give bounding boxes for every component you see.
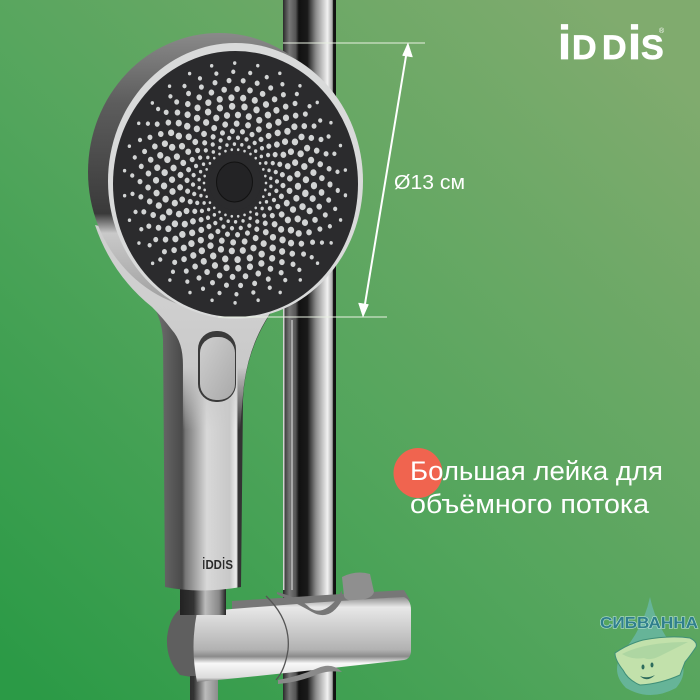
clamp body <box>194 597 411 682</box>
caption: Большая лейка для <box>410 456 663 486</box>
brand logo: D <box>572 29 597 67</box>
handle body <box>150 300 280 590</box>
brand logo: i <box>558 16 571 69</box>
handle neck <box>180 585 226 615</box>
clamp ring <box>266 596 288 680</box>
bathtub <box>615 637 696 685</box>
dimension line bottom <box>218 316 387 318</box>
accent circle <box>394 448 442 498</box>
clamp upper band <box>232 590 410 625</box>
registered mark: ® <box>659 27 665 35</box>
dimension line top <box>283 42 425 44</box>
center button <box>216 162 252 202</box>
handle shoulder <box>95 225 280 430</box>
face plate <box>113 51 358 317</box>
nozzle dots <box>113 51 357 315</box>
handle logo: iDDiS <box>202 554 233 573</box>
rail bracket bottom <box>278 666 342 684</box>
head back shell <box>88 33 350 311</box>
shower handle <box>95 225 280 615</box>
retailer name: СИБВАННА <box>600 615 698 632</box>
chrome rim <box>108 43 363 319</box>
tub inner <box>622 642 688 659</box>
double arrow <box>358 43 412 317</box>
lower neck <box>190 676 218 700</box>
tub face <box>640 662 655 679</box>
brand logo: i <box>628 16 641 69</box>
center hub <box>209 154 261 210</box>
caption: объёмного потока <box>410 489 650 519</box>
shower head <box>88 33 363 319</box>
retailer logo <box>600 597 698 695</box>
button <box>198 331 236 402</box>
rail bracket top <box>277 590 342 615</box>
brand logo <box>558 16 665 69</box>
brand logo: S <box>641 29 664 67</box>
diameter label: Ø13 см <box>394 172 465 194</box>
shower rail <box>283 0 336 700</box>
brand logo: D <box>602 29 627 67</box>
clamp knob <box>342 573 374 601</box>
sliding clamp <box>167 573 411 700</box>
clamp left cap <box>167 607 197 678</box>
drop <box>617 597 684 695</box>
